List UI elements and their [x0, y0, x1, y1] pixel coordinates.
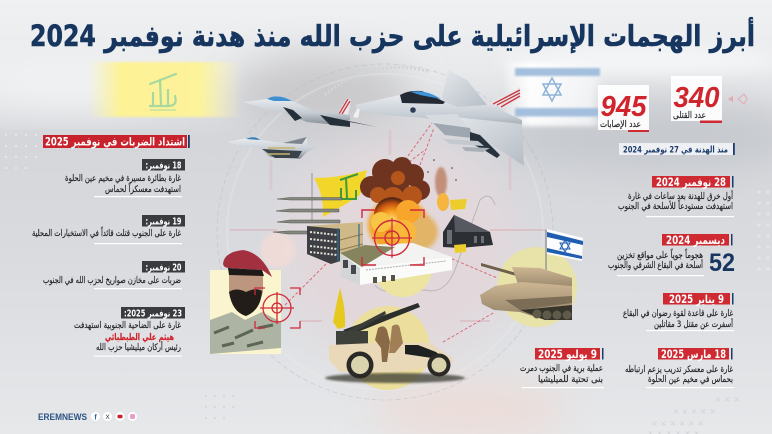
entry: December 2024: 52: [709, 249, 735, 277]
entry: 28 November 2024: استهدفت مستودعاً للأسلحة في الجنوب: [618, 199, 733, 212]
Israeli flag, faded: [505, 62, 605, 126]
fighter jet: small lower: [227, 137, 319, 159]
entry: 18 November: [65, 159, 185, 197]
entry: 9 January 2025: 9 يناير 2025: [669, 292, 724, 306]
entry: 20 November: ضربات على مخازن صواريخ لحزب الله في الجنوب: [43, 276, 181, 286]
decorative dot pattern: right: [757, 190, 770, 271]
icon: facebook: f: [94, 414, 97, 422]
decorative dot pattern: bottom left: [205, 395, 234, 419]
entry: 20 November: [43, 261, 185, 289]
military jeep with yellow flag: [325, 288, 465, 390]
Hezbollah flag on pole: [312, 170, 367, 223]
decorative cross pattern: bottom right: × × × × ×: [672, 407, 716, 416]
entry: 9 July 2025: عملية برية في الجنوب دمرت: [520, 364, 603, 374]
Hezbollah flag, faded: [90, 62, 242, 117]
panel: strikes escalated November 2025: [32, 134, 190, 357]
missiles: [273, 198, 342, 234]
entry: 18 March 2025: 18 مارس 2025: [661, 347, 726, 361]
entry: 9 January 2025: أسفرت عن مقتل 3 مقاتلين: [654, 318, 733, 330]
arrow chevrons: [728, 94, 747, 104]
entry: 28 November 2024: أول خرق للهدنة بعد ساعات في غارة: [628, 190, 733, 202]
yellow glow behind building: [374, 239, 432, 297]
explosion: [360, 157, 438, 253]
entry: 18 November: 18 نوفمبر:: [146, 160, 182, 172]
entry: 18 March 2025: بحماس في مخيم عين الحلوة: [648, 375, 733, 385]
entry: December 2024: ديسمبر 2024: [666, 233, 725, 247]
fighter jet: small top: [243, 96, 377, 127]
portrait crosshair target: [255, 288, 300, 328]
icon: X: X: [105, 414, 110, 421]
fighter jet: large: [355, 70, 524, 166]
stat: killed 340: عدد القتلى: [673, 111, 706, 121]
icon: instagram: [128, 412, 137, 421]
entry: 20 November: 20 نوفمبر:: [146, 262, 182, 274]
entry: 28 November 2024: [618, 175, 734, 217]
entry: 19 November: 19 نوفمبر:: [146, 216, 182, 228]
small yellow flag on building: [454, 244, 466, 253]
decorative dot pattern: top left: [5, 134, 37, 169]
entry: 9 July 2025: 9 يوليو 2025: [538, 347, 597, 362]
tent: [443, 215, 493, 248]
entry: December 2024: هجوماً جوياً على مواقع تخزين: [617, 248, 703, 261]
entry: 9 January 2025: غارة على قاعدة لقوة رضوان في البقاع: [623, 309, 733, 319]
decorative cross pattern: bottom right: [647, 395, 740, 434]
decorative cross pattern: bottom right: × × ×: [715, 395, 740, 404]
Hezbollah emblem: [150, 74, 176, 110]
entry: 23 November: [74, 307, 185, 357]
rocket launcher crates: [307, 222, 363, 264]
entry: 23 November: رئيس أركان ميليشيا حزب الله: [96, 341, 181, 353]
small yellow flag: [450, 199, 467, 210]
smoke particles near commander: [261, 232, 295, 268]
stat: killed 340: 340: [674, 82, 720, 114]
panel: timeline since the truce: [520, 143, 735, 388]
stat: wounded 945: [598, 85, 649, 132]
entry: 9 July 2025: [520, 347, 604, 388]
stat: wounded 945: عدد الإصابات: [600, 120, 641, 130]
entry: 19 November: غارة على الجنوب قتلت قائداً في الاستخبارات المحلية: [32, 226, 181, 239]
since truce heading: منذ الهدنة في 27 نوفمبر 2024: [623, 146, 728, 156]
entry: 9 January 2025: [623, 292, 734, 331]
entry: December 2024: [608, 233, 735, 277]
white building: [340, 243, 452, 285]
entry: 9 July 2025: بنى تحتية للميليشيا: [538, 375, 603, 385]
stat: killed 340: [671, 76, 722, 123]
entry: 18 November: غارة بطائرة مسيرة في مخيم عين الحلوة: [65, 174, 181, 184]
brand footer: [38, 412, 137, 423]
icon: youtube: [116, 412, 124, 421]
entry: 28 November 2024: 28 نوفمبر 2024: [656, 175, 726, 190]
entry: 23 November: 23 نوفمبر 2025:: [124, 308, 182, 320]
side fireball with debris: [427, 159, 457, 211]
main crosshair target: [362, 210, 424, 265]
entry: 18 March 2025: [625, 347, 734, 388]
panel heading: اشتداد الضربات في نوفمبر 2025: [45, 134, 185, 150]
entry: 18 November: استهدفت معسكراً لحماس: [105, 182, 181, 195]
brand footer: EREMNEWS: [38, 412, 87, 423]
decorative cross pattern: bottom right: × × × × × ×: [651, 419, 704, 428]
entry: December 2024: أسلحة في البقاع الشرقي والجنوب: [608, 259, 703, 271]
Merkava tank with Israeli flag: [480, 229, 583, 327]
portrait: commander: [210, 250, 281, 354]
target rings and dashed lines: [217, 64, 553, 400]
entry: 18 March 2025: غارة على معسكر تدريب يزعم ارتباطه: [625, 365, 733, 375]
stat: wounded 945: 945: [600, 91, 647, 123]
entry: 23 November: غارة على الضاحية الجنوبية استهدفت: [74, 321, 181, 331]
entry: 19 November: [32, 215, 185, 244]
entry: 23 November: هيثم علي الطبطبائي: [105, 333, 174, 343]
